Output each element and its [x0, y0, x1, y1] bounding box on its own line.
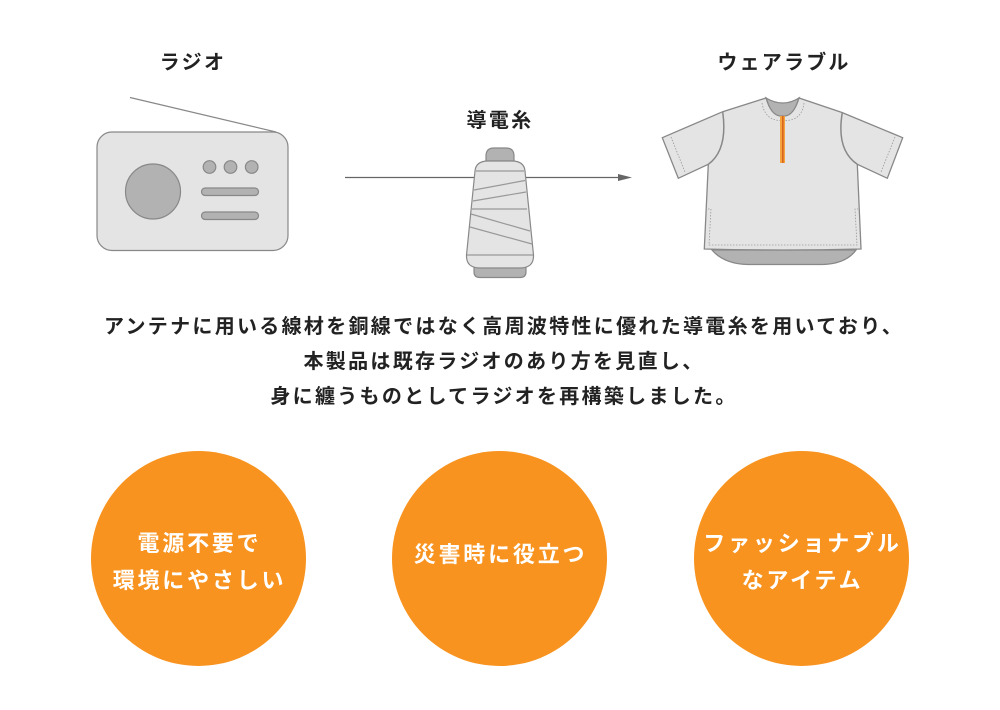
heading: wearable: ウェアラブル — [717, 52, 851, 74]
description text: アンテナに用いる線材を銅線ではなく高周波特性に優れた導電糸を用いており、 — [104, 316, 904, 338]
circle: eco friendly: 電源不要で — [137, 531, 262, 556]
diagram: radio, thread and wearable — [96, 96, 904, 278]
description text: 本製品は既存ラジオのあり方を見直し、 — [304, 351, 704, 373]
arrow: radio to wearable — [345, 174, 632, 181]
circle: useful in disaster — [392, 451, 607, 666]
circle: useful in disaster: 災害時に役立つ — [414, 542, 587, 567]
description text — [104, 316, 904, 408]
circle: fashionable item: なアイテム — [742, 568, 863, 592]
circle: eco friendly — [91, 451, 306, 666]
circle: fashionable item — [694, 451, 909, 666]
circle: eco friendly: 環境にやさしい — [113, 568, 286, 592]
icon: thread spool — [466, 148, 534, 278]
heading: conductive thread: 導電糸 — [467, 110, 533, 132]
circle: fashionable item: ファッショナブル — [703, 531, 902, 556]
description text: 身に纏うものとしてラジオを再構築しました。 — [270, 386, 738, 408]
heading: radio: ラジオ — [160, 52, 226, 74]
icon: radio — [97, 98, 288, 250]
icon: wearable shirt — [662, 98, 903, 264]
